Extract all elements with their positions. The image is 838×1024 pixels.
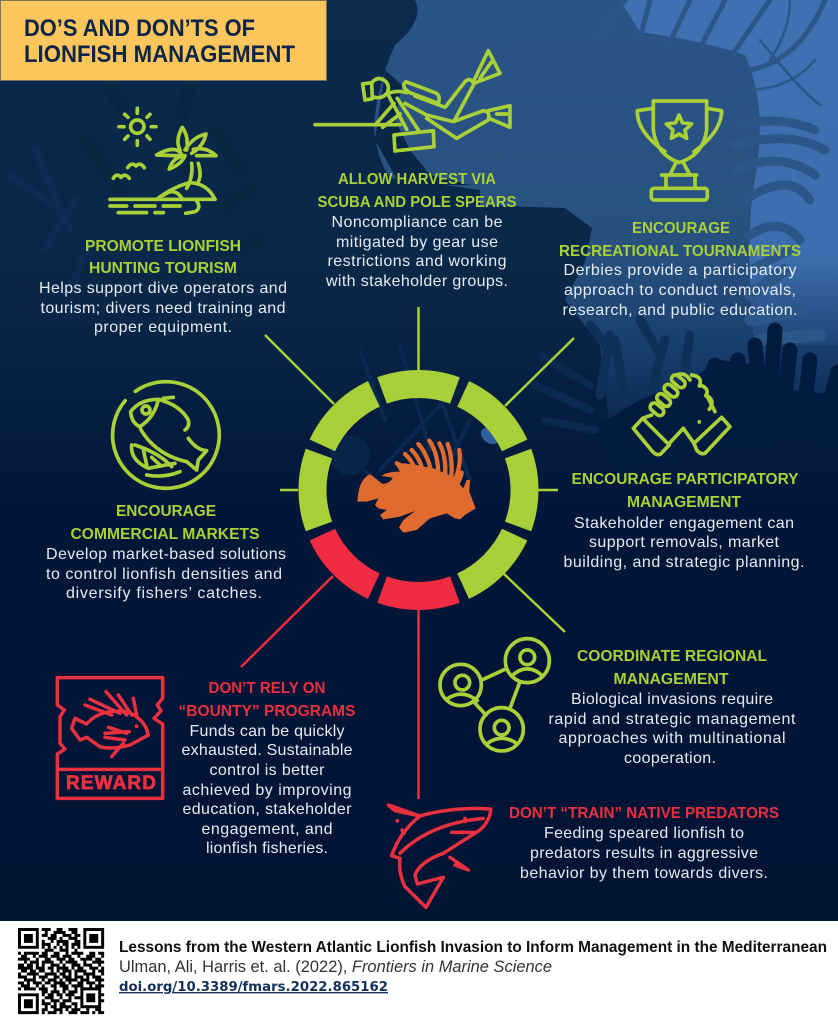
- body text: feeding: predators results in aggressive: [530, 845, 758, 862]
- central segmented ring: [312, 384, 525, 596]
- panel: encourage commercial markets: [46, 382, 286, 602]
- heading: coordinate: [577, 648, 767, 688]
- body text: funds: achieved by improving: [182, 782, 352, 799]
- body text: funds: exhausted. Sustainable: [182, 742, 353, 759]
- body text: tourism: proper equipment.: [94, 319, 232, 336]
- heading: allow harvest: [318, 171, 516, 211]
- footer: citation strip: [0, 921, 838, 1024]
- citation text: [119, 939, 827, 995]
- icon: scuba diver with spear: [315, 51, 510, 151]
- body text: tourism: [39, 280, 287, 336]
- body text: funds: [182, 723, 353, 857]
- body text: funds: control is better: [210, 762, 325, 779]
- heading: tournaments: ENCOURAGE: [632, 220, 730, 237]
- body text: funds: education, stakeholder: [182, 801, 352, 818]
- body text: derbies: research, and public education.: [562, 302, 798, 319]
- heading: bounty: [178, 680, 356, 720]
- icon: fish on plate with lemon: [113, 382, 219, 488]
- body text: noncompliance: mitigated by gear use: [336, 234, 498, 251]
- icon: trophy: [637, 101, 722, 200]
- body text: biological invasions: Biological invasions require: [571, 691, 773, 708]
- icon: reward poster with lionfish: [57, 678, 163, 798]
- heading: allow harvest: ALLOW HARVEST VIA: [338, 171, 496, 188]
- body text: biological invasions: approaches with multinational: [558, 730, 786, 747]
- panel: coordinate regional management: [440, 639, 796, 767]
- panel: allow harvest via scuba and pole spears: [315, 51, 516, 290]
- heading: commercial markets: COMMERCIAL MARKETS: [70, 526, 260, 543]
- QR code: [18, 929, 104, 1013]
- body text: noncompliance: Noncompliance can be: [332, 214, 503, 231]
- icon: central lionfish silhouette: [357, 441, 476, 533]
- icon: connected people network: [440, 639, 549, 751]
- heading: bounty: DON’T RELY ON: [208, 680, 326, 697]
- body text: biological invasions: rapid and strategic management: [548, 711, 796, 728]
- body text: tourism: tourism; divers need training and: [40, 300, 286, 317]
- body text: market-based: diversify fishers’ catches.: [66, 585, 262, 602]
- body text: derbies: [562, 262, 798, 319]
- body text: market-based: to control lionfish densities and: [46, 566, 282, 583]
- body text: funds: lionfish fisheries.: [206, 840, 328, 857]
- heading: native predators: DON’T “TRAIN” NATIVE PREDATORS: [509, 805, 779, 822]
- heading: coordinate: MANAGEMENT: [614, 671, 729, 688]
- body text: stakeholder: building, and strategic planning.: [564, 554, 804, 571]
- heading: commercial markets: [70, 503, 260, 543]
- connector lines from ring to each item: [241, 307, 574, 799]
- body text: derbies: approach to conduct removals,: [564, 282, 796, 299]
- heading: participatory: [572, 471, 799, 511]
- heading: participatory: ENCOURAGE PARTICIPATORY: [572, 471, 799, 488]
- title banner: DO’S AND DON’TS OF: [24, 15, 255, 42]
- heading: promote lionfish hunting tourism: [85, 238, 241, 277]
- panel: encourage participatory management: [564, 373, 804, 571]
- panel: encourage recreational tournaments: [559, 101, 801, 319]
- body text: biological invasions: [548, 691, 796, 767]
- body text: feeding: Feeding speared lionfish to: [544, 825, 744, 842]
- heading: bounty: “BOUNTY” PROGRAMS: [178, 703, 356, 720]
- body text: noncompliance: [325, 214, 508, 290]
- body text: noncompliance: with stakeholder groups.: [325, 273, 508, 290]
- body text: biological invasions: cooperation.: [624, 750, 716, 767]
- panel: don't rely on bounty programs: [57, 678, 356, 857]
- heading: tournaments: [559, 220, 801, 260]
- title banner: [0, 0, 326, 80]
- citation text: Lessons from the Western Atlantic Lionfish Invasion to Inform Management in the Mediterranean: [119, 939, 827, 956]
- body text: funds: engagement, and: [202, 821, 332, 838]
- body text: stakeholder: Stakeholder engagement can: [574, 515, 794, 532]
- heading: promote lionfish hunting tourism: HUNTING TOURISM: [89, 260, 237, 277]
- icon: clasped hands: [633, 373, 730, 455]
- icon: shark: [388, 805, 491, 907]
- body text: market-based: [46, 546, 286, 602]
- icon: reward poster with lionfish: REWARD: [66, 773, 156, 794]
- body text: feeding: behavior by them towards divers.: [520, 865, 768, 882]
- heading: coordinate: COORDINATE REGIONAL: [577, 648, 767, 665]
- body text: derbies: Derbies provide a participatory: [564, 262, 796, 279]
- body text: market-based: Develop market-based solutions: [46, 546, 286, 563]
- panel: promote lionfish hunting tourism: [39, 108, 287, 336]
- body text: feeding: [520, 825, 768, 882]
- title banner: LIONFISH MANAGEMENT: [24, 41, 295, 68]
- icon: island with palm tree and sun: [110, 108, 216, 213]
- citation text: Ulman, Ali, Harris et. al. (2022), Frontiers in Marine Science: [119, 958, 552, 976]
- body text: tourism: Helps support dive operators and: [39, 280, 287, 297]
- panel: don't train native predators: [388, 805, 779, 907]
- body text: noncompliance: restrictions and working: [328, 253, 506, 270]
- heading: participatory: MANAGEMENT: [627, 494, 742, 511]
- body text: stakeholder: support removals, market: [589, 534, 780, 551]
- heading: tournaments: RECREATIONAL TOURNAMENTS: [559, 243, 801, 260]
- citation text: doi.org/10.3389/fmars.2022.865162: [119, 979, 388, 995]
- heading: commercial markets: ENCOURAGE: [116, 503, 216, 520]
- heading: promote lionfish hunting tourism: PROMOTE LIONFISH: [85, 238, 241, 255]
- body text: funds: Funds can be quickly: [190, 723, 344, 740]
- heading: allow harvest: SCUBA AND POLE SPEARS: [318, 194, 516, 211]
- body text: stakeholder: [564, 515, 804, 571]
